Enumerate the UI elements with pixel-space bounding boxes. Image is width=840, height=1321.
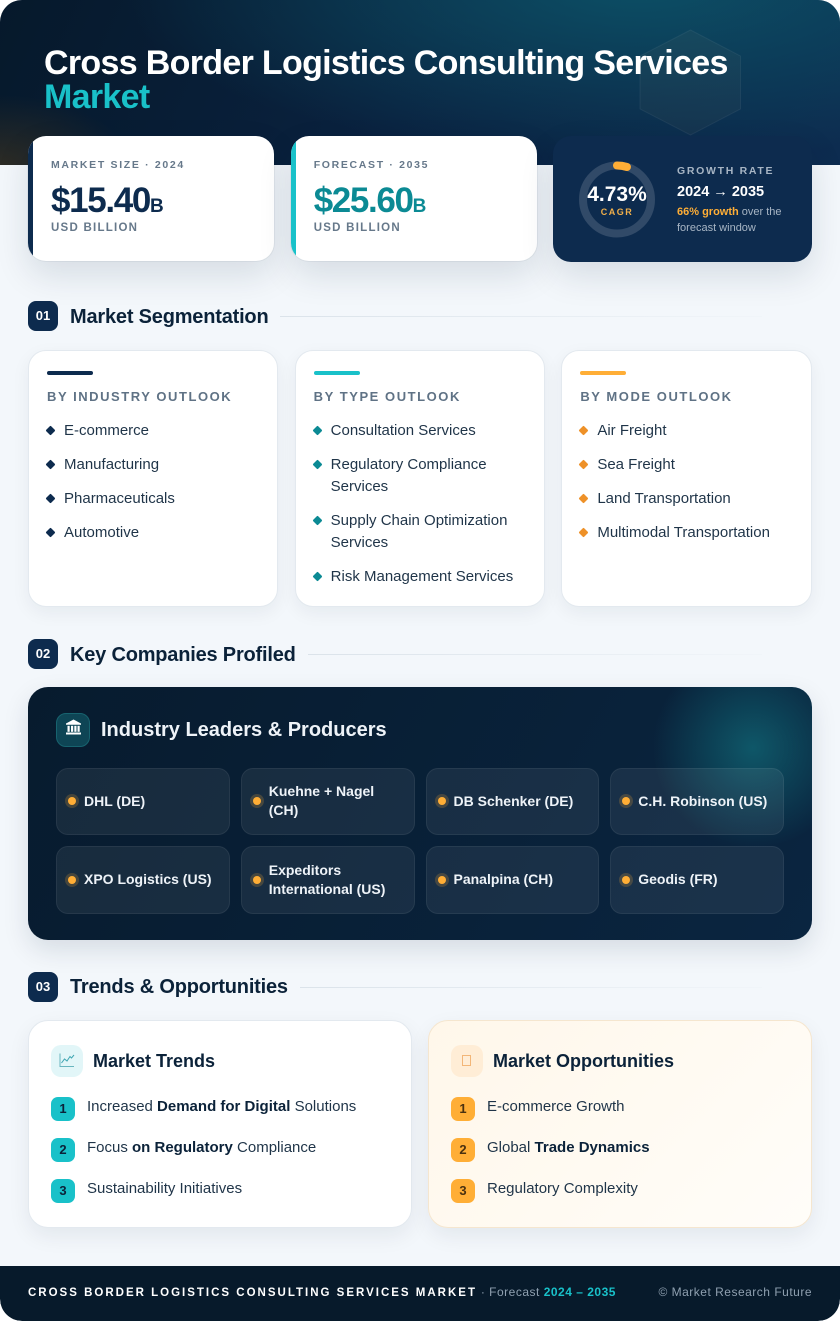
company: Geodis: Geodis (FR): [638, 871, 718, 887]
panel: by industry outlook: E-commerce: [64, 422, 149, 439]
growth period: 2024 → 2035: [677, 184, 764, 200]
card heading: Market Trends: [93, 1051, 215, 1071]
trend 1: [51, 1097, 75, 1121]
title: [44, 44, 728, 116]
panel: market trends: Increased Demand for Digital Solutions: [87, 1098, 356, 1115]
trend 1: 1: [59, 1101, 67, 1116]
opportunity 3: [451, 1179, 475, 1203]
stat card: growth rate: [553, 136, 812, 262]
panel: market opportunities: E-commerce Growth: [487, 1098, 625, 1115]
panel: market trends: Sustainability Initiatives: [87, 1180, 242, 1197]
CAGR value: 4.73%: [587, 183, 647, 206]
heading: key companies: Key Companies Profiled: [70, 644, 296, 666]
footer: [0, 1266, 840, 1321]
panel: industry leaders: [28, 687, 812, 940]
company: DB Schenker: [426, 768, 599, 835]
company: DB Schenker: DB Schenker (DE): [454, 793, 573, 809]
company: XPO Logistics: [56, 846, 230, 914]
stat card: forecast: [291, 136, 537, 261]
header band: [0, 0, 840, 165]
heading: trends: Trends & Opportunities: [70, 976, 288, 998]
heading: key companies: 02: [36, 646, 50, 661]
company: XPO Logistics: XPO Logistics (US): [84, 871, 212, 887]
opportunity 3: 3: [459, 1183, 467, 1198]
stat card: forecast: FORECAST · 2035: [314, 159, 429, 171]
panel: by type outlook: Regulatory Compliance Services: [331, 456, 487, 495]
panel: by industry outlook: Manufacturing: [64, 456, 159, 473]
stat card: forecast: $25.60B: [314, 181, 426, 220]
panel: market opportunities: [428, 1020, 812, 1228]
panel: by mode outlook: BY MODE OUTLOOK: [580, 389, 733, 404]
CAGR label: CAGR: [601, 207, 633, 217]
company: DHL: [56, 768, 230, 835]
trend 2: 2: [59, 1142, 67, 1157]
opportunity 2: [451, 1138, 475, 1162]
company: Kuehne + Nagel: Kuehne + Nagel (CH): [269, 783, 374, 818]
panel: by type outlook: Supply Chain Optimization Services: [331, 512, 507, 551]
panel: by type outlook: Risk Management Services: [331, 568, 513, 585]
panel: market opportunities: Global Trade Dynamics: [487, 1139, 650, 1156]
footer title: CROSS BORDER LOGISTICS CONSULTING SERVICES MARKET · Forecast 2024 – 2035: [28, 1285, 616, 1299]
opportunity 1: [451, 1097, 475, 1121]
heading: trends: 03: [36, 979, 50, 994]
stat card: market size: $15.40B: [51, 181, 164, 220]
growth note: 66% growth over the: [677, 206, 782, 218]
heading: market segmentation: [28, 301, 638, 331]
panel: by industry outlook: [28, 350, 278, 607]
growth note: [677, 206, 782, 234]
stat card: market size: [28, 136, 274, 261]
title: Market: [44, 78, 150, 116]
title: Cross Border Logistics Consulting Services: [44, 44, 728, 82]
heading: market segmentation: Market Segmentation: [70, 306, 268, 328]
growth note: forecast window: [677, 222, 756, 234]
panel: market trends: Focus on Regulatory Compliance: [87, 1139, 316, 1156]
panel: by mode outlook: [561, 350, 812, 607]
company: Panalpina: [426, 846, 599, 914]
stat card: forecast: USD BILLION: [314, 222, 401, 234]
company: Expeditors: [241, 846, 414, 914]
company: Panalpina: Panalpina (CH): [454, 871, 553, 887]
company: C.H. Robinson: [610, 768, 784, 835]
company: Expeditors: Expeditors International (US): [269, 862, 385, 897]
company: C.H. Robinson: C.H. Robinson (US): [638, 793, 767, 809]
icon: chart: [51, 1045, 83, 1077]
stat card: market size: MARKET SIZE · 2024: [51, 159, 185, 171]
trend 2: [51, 1138, 75, 1162]
panel: by industry outlook: Pharmaceuticals: [64, 490, 175, 507]
opportunity 2: 2: [459, 1142, 467, 1157]
panel: by industry outlook: BY INDUSTRY OUTLOOK: [47, 389, 232, 404]
heading: market segmentation: 01: [36, 308, 50, 323]
company: Kuehne + Nagel: [241, 768, 414, 835]
panel: by type outlook: BY TYPE OUTLOOK: [314, 389, 461, 404]
icon: institution: [56, 713, 90, 747]
panel: by mode outlook: Land Transportation: [597, 490, 731, 507]
heading: trends: [28, 972, 642, 1002]
card heading: Market Opportunities: [493, 1051, 674, 1071]
panel: by mode outlook: Air Freight: [597, 422, 667, 439]
panel: market trends: [28, 1020, 412, 1228]
trend 3: 3: [59, 1183, 67, 1198]
heading: key companies: [28, 639, 642, 669]
growth label: GROWTH RATE: [677, 165, 774, 177]
panel: by type outlook: Consultation Services: [331, 422, 476, 439]
CAGR ring: [579, 162, 655, 238]
panel: by industry outlook: Automotive: [64, 524, 139, 541]
company: DHL: DHL (DE): [84, 793, 145, 809]
decorative hexagon: [640, 30, 741, 136]
opportunity 1: 1: [459, 1101, 467, 1116]
company: Geodis: [610, 846, 784, 914]
trend 3: [51, 1179, 75, 1203]
panel heading: Industry Leaders & Producers: [101, 719, 387, 741]
panel: market opportunities: Regulatory Complexity: [487, 1180, 638, 1197]
panel: by type outlook: [295, 350, 545, 607]
icon: placeholder box: [451, 1045, 483, 1077]
panel: by mode outlook: Sea Freight: [597, 456, 675, 473]
stat card: market size: USD BILLION: [51, 222, 138, 234]
footer credit: © Market Research Future: [658, 1285, 812, 1299]
panel: by mode outlook: Multimodal Transportation: [597, 524, 770, 541]
